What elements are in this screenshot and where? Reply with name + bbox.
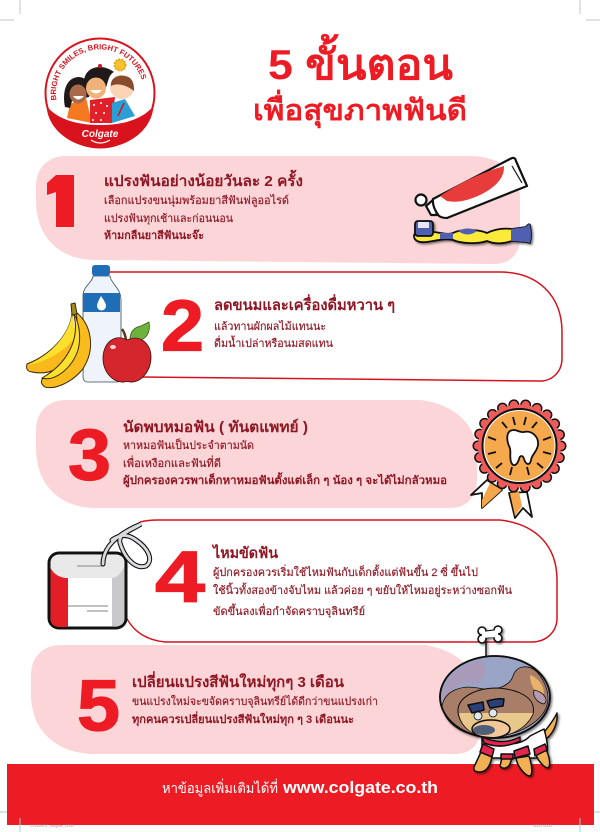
step 1 text: เลือกแปรงขนนุ่มพร้อมยาสีฟันฟลูออไรด์ [104, 194, 289, 207]
step 4 text: ใช้นิ้วทั้งสองข้างจับไหม แล้วค่อย ๆ ขยับให้ไหมอยู่ระหว่างซอกฟัน [213, 582, 512, 597]
panel 2 [27, 265, 562, 388]
print slug text: 0000 0000 [533, 823, 553, 828]
number 5: 5 [77, 666, 120, 746]
print slug text: 20150901_colgate_0001 [30, 823, 75, 828]
number 2: 2 [161, 286, 204, 366]
panel 3 [36, 400, 561, 518]
step 4 text [211, 543, 512, 618]
title: 5 ขั้นตอน [268, 33, 453, 88]
step 4 text: ไหมขัดฟัน [211, 543, 279, 562]
panel 4 [49, 520, 557, 642]
step 5 text [132, 671, 378, 727]
step 4 text: ขัดขึ้นลงเพื่อกำจัดคราบจุลินทรีย์ [213, 603, 365, 618]
step 3 text: เพื่อเหงือกและฟันที่ดี [123, 455, 221, 470]
print slug text [30, 823, 553, 828]
title [253, 33, 467, 128]
panel 5 [31, 645, 480, 754]
icon: toothpaste tube [416, 158, 527, 218]
step 4 text: ผู้ปกครองควรเริ่มใช้ไหมฟันกับเด็กตั้งแต่ฟันขึ้น 2 ซี่ ขึ้นไป [213, 564, 478, 579]
helmet [440, 656, 550, 738]
title: เพื่อสุขภาพฟันดี [253, 89, 467, 128]
icon: apple [103, 322, 151, 382]
step 5 text: เปลี่ยนแปรงสีฟันใหม่ทุกๆ 3 เดือน [132, 671, 345, 692]
step 3 text: หาหมอฟันเป็นประจำตามนัด [123, 438, 254, 452]
sun [114, 60, 126, 70]
eyebrows and eyes [468, 702, 484, 713]
step 2 text: ดื่มน้ำเปล่าหรือนมสดแทน [214, 335, 333, 350]
step 2 text: แล้วทานผักผลไม้แทนนะ [214, 320, 326, 333]
icon: medal rosette with tooth [471, 404, 561, 518]
child middle [90, 97, 115, 123]
step 1 text: แปรงฟันอย่างน้อยวันละ 2 ครั้ง [104, 169, 303, 190]
Colgate wordmark: Colgate [82, 129, 119, 140]
footer banner: www.colgate.co.th [282, 779, 438, 797]
body [482, 729, 547, 758]
step 3 text: นัดพบหมอฟัน ( ทันตแพทย์ ) [123, 418, 308, 436]
icon: astronaut dog [440, 626, 557, 776]
icon: water bottle [83, 265, 121, 382]
number 4: 4 [155, 538, 205, 618]
helmet rim [440, 656, 550, 738]
logo badge: Bright Smiles, Bright Futures [44, 38, 156, 148]
number 1 [47, 175, 74, 227]
icon: toothbrush [414, 221, 531, 243]
step 3 text [123, 418, 447, 488]
muzzle [472, 720, 510, 738]
logo badge: Bright Smiles, Bright Futures: BRIGHT SMILES, BRIGHT FUTURES [50, 44, 146, 100]
footer banner: หาข้อมูลเพิ่มเติมได้ที่ [162, 779, 278, 797]
legs [474, 752, 492, 772]
step 2 text: ลดขนมและเครื่องดื่มหวาน ๆ [214, 294, 395, 314]
dog head and ears [442, 667, 548, 737]
collar [482, 737, 520, 746]
step 2 text [214, 294, 395, 350]
step 1 text [104, 169, 303, 242]
footer banner [7, 764, 594, 825]
panel 1 [36, 156, 531, 264]
step 3 text: ผู้ปกครองควรพาเด็กหาหมอฟันตั้งแต่เล็ก ๆ น้อง ๆ จะได้ไม่กลัวหมอ [123, 472, 447, 488]
step 5 text: ขนแปรงใหม่จะขจัดคราบจุลินทรีย์ได้ดีกว่าขนแปรงเก่า [132, 695, 378, 708]
child left [67, 98, 92, 123]
step 1 text: แปรงฟันทุกเช้าและก่อนนอน [104, 213, 233, 225]
tail [542, 713, 557, 739]
step 5 text: ทุกคนควรเปลี่ยนแปรงสีฟันใหม่ทุก ๆ 3 เดือนนะ [132, 711, 354, 727]
bone antenna [478, 626, 502, 658]
child right [112, 99, 135, 123]
number 3: 3 [68, 416, 111, 496]
icon: dental floss box [49, 524, 150, 628]
step 1 text: ห้ามกลืนยาสีฟันนะจ๊ะ [104, 229, 204, 242]
icon: bananas [27, 303, 91, 388]
